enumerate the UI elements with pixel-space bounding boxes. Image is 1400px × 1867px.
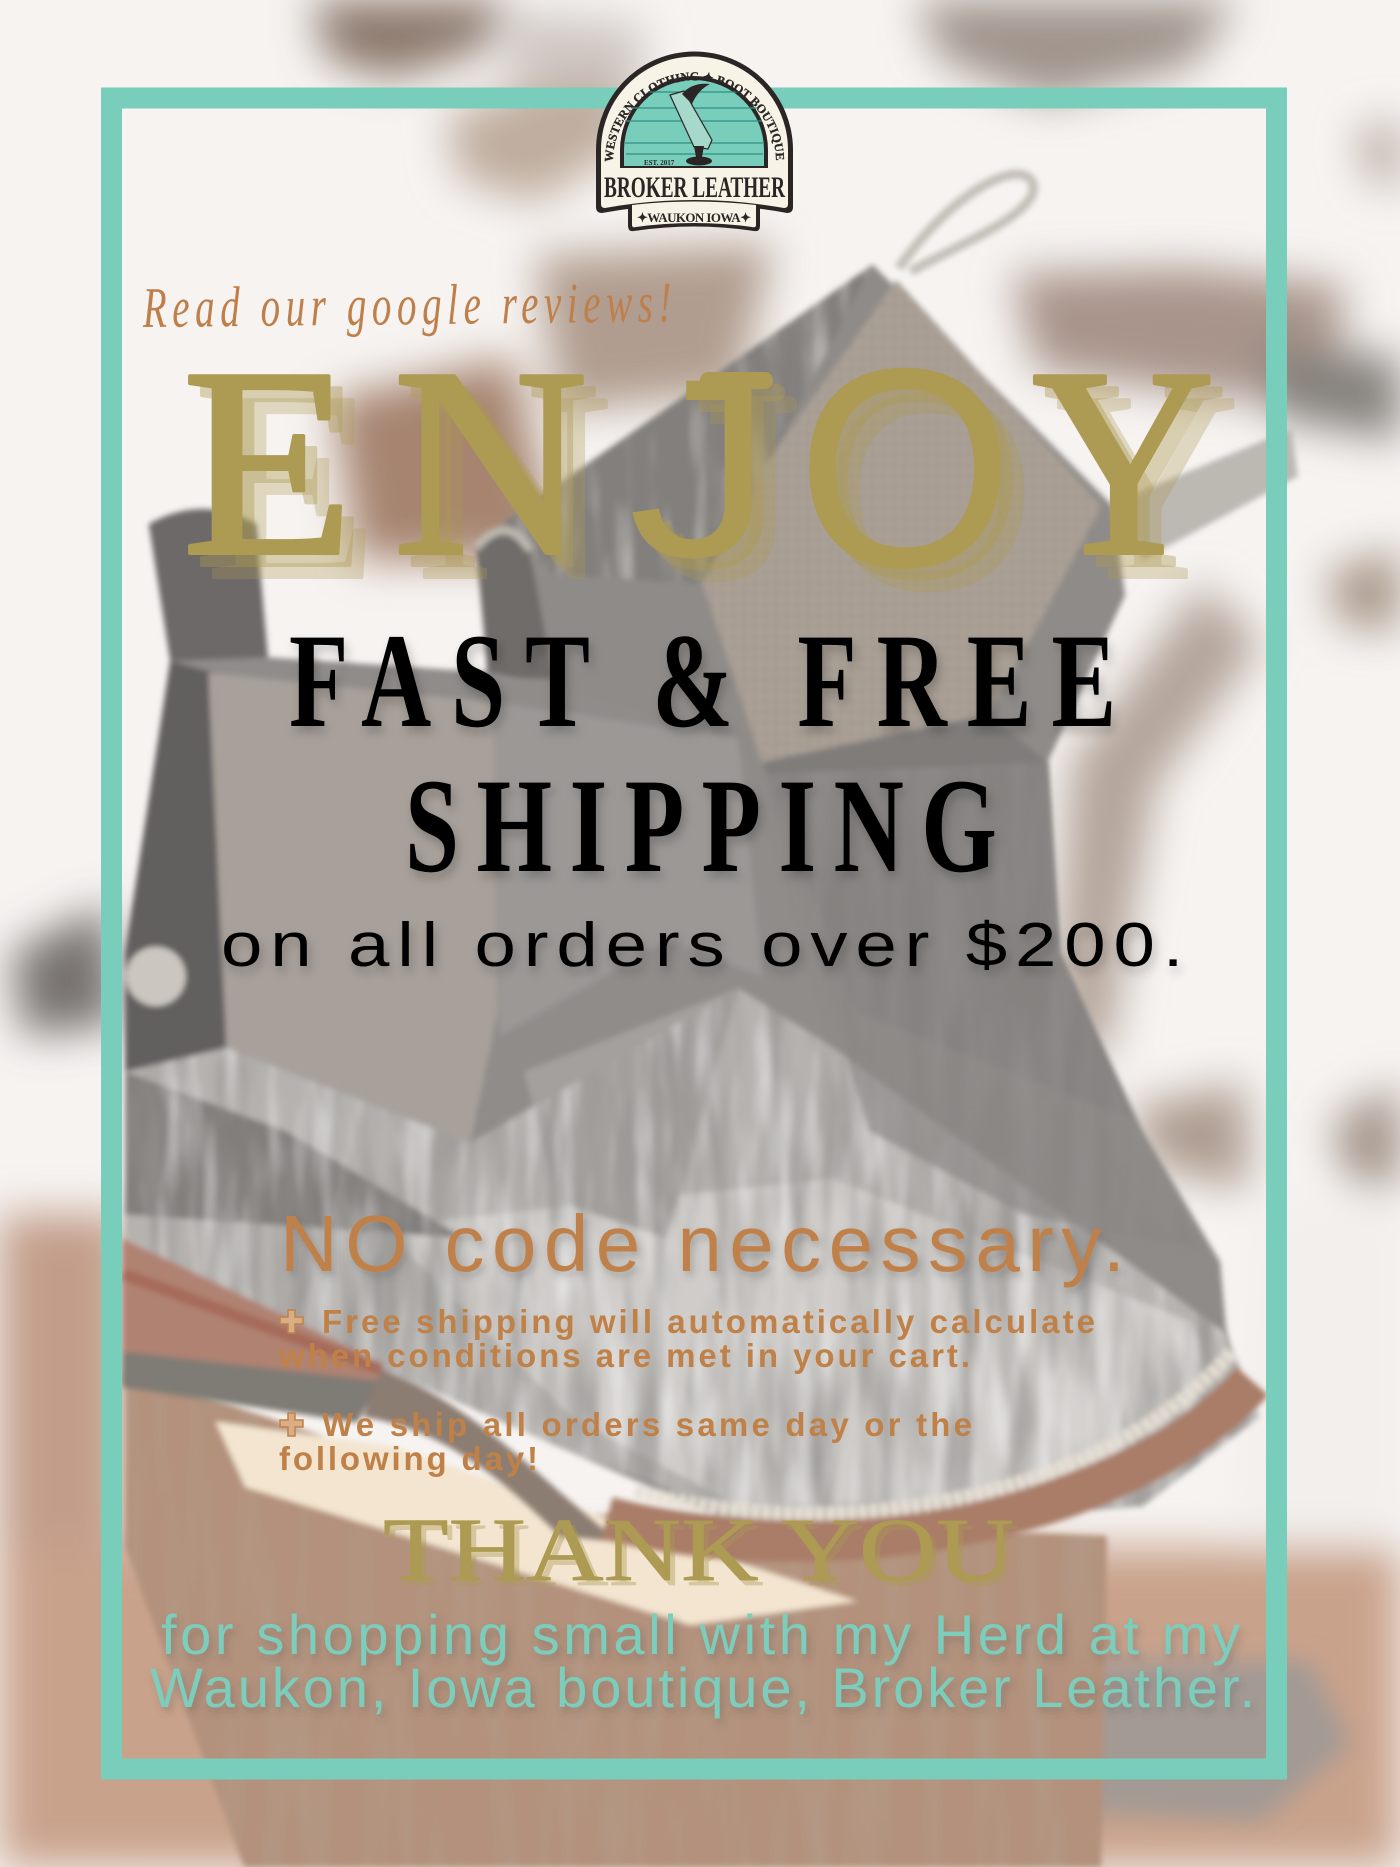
logo location: ✦WAUKON IOWA✦ — [637, 210, 751, 225]
heading: FAST & FREE SHIPPING: FAST & FREE — [289, 607, 1116, 756]
logo wood plank lines — [625, 92, 763, 154]
logo established date: EST. 2017 — [644, 159, 675, 167]
logo name: BROKER LEATHER — [604, 171, 785, 204]
heading: ENJOY with layered shadows: O — [820, 334, 1038, 651]
heading: ENJOY with layered shadows: Y — [1044, 325, 1227, 624]
shipping details list: following day! — [279, 1440, 538, 1477]
heading: thank you: THANK YOU — [383, 1501, 1014, 1600]
heading: ENJOY with layered shadows: E — [182, 313, 354, 612]
logo curved tagline: WESTERN CLOTHING ✦ BOOT BOUTIQUE — [604, 72, 784, 162]
heading: ENJOY with layered shadows: J — [628, 326, 773, 611]
stump — [125, 1369, 1107, 1867]
shipping details list: We ship all orders same day or the — [322, 1406, 972, 1443]
heading: no code necessary: NO code necessary. — [280, 1199, 1125, 1288]
heading: ENJOY with layered shadows: E — [206, 337, 378, 636]
icon: cross bullet two — [280, 1413, 303, 1436]
back boot — [476, 174, 1298, 1357]
heading: thank you: THANK YOU — [388, 1506, 1019, 1605]
closing message: for shopping small with my Herd at my — [161, 1603, 1240, 1666]
teal frame — [112, 98, 1276, 1769]
heading: ENJOY with layered shadows: O — [808, 322, 1026, 639]
shipping details list — [278, 1303, 1095, 1477]
heading: ENJOY with layered shadows: O — [796, 310, 1014, 627]
heading: FAST & FREE SHIPPING — [289, 607, 1116, 901]
heading: FAST & FREE SHIPPING: SHIPPING — [405, 752, 997, 901]
closing message: Waukon, Iowa boutique, Broker Leather. — [150, 1656, 1255, 1719]
icon: boot on logo — [670, 84, 712, 166]
subheading: order threshold: on all orders over $200. — [221, 910, 1183, 980]
logo: Broker Leather badge — [596, 52, 793, 232]
icon: cross bullet one — [280, 1310, 303, 1333]
heading: ENJOY with layered shadows: N — [405, 325, 600, 624]
heading: ENJOY with layered shadows: N — [393, 313, 588, 612]
shipping details list: when conditions are met in your cart. — [278, 1337, 970, 1374]
heading: ENJOY with layered shadows — [182, 310, 1239, 651]
heading: ENJOY with layered shadows: N — [417, 337, 612, 636]
front boot — [123, 509, 1260, 1542]
heading: ENJOY with layered shadows: J — [640, 338, 785, 623]
closing message — [150, 1603, 1255, 1719]
heading: ENJOY with layered shadows: Y — [1056, 337, 1239, 636]
shipping details list: Free shipping will automatically calculate — [322, 1303, 1095, 1340]
heading: ENJOY with layered shadows: E — [194, 325, 366, 624]
heading: ENJOY with layered shadows: Y — [1032, 313, 1215, 612]
script note: read our google reviews: Read our google reviews! — [142, 270, 672, 340]
heading: ENJOY with layered shadows: J — [652, 350, 797, 635]
